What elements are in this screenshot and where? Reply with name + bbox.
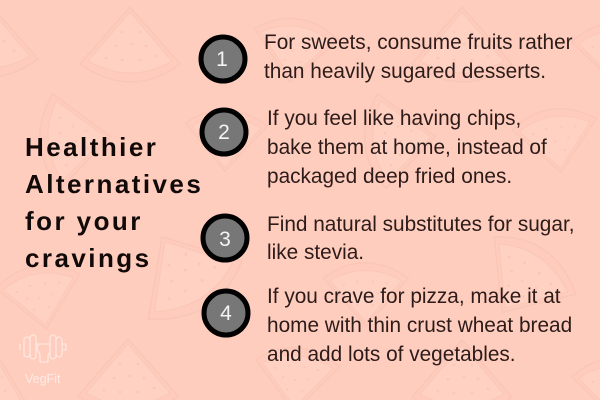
badge 4: [204, 291, 248, 335]
text 2: packaged deep fried ones.: [267, 165, 512, 188]
text 2: If you feel like having chips,: [267, 107, 521, 130]
badge 4: 4: [220, 302, 232, 325]
brand name: VegFit: [25, 372, 61, 386]
item 3: [203, 213, 574, 264]
title: Healthier: [25, 132, 158, 162]
text 1: For sweets, consume fruits rather: [264, 31, 573, 54]
title: [25, 132, 203, 273]
text 2: [267, 107, 547, 188]
text 4: [267, 285, 572, 366]
badge 1: 1: [216, 48, 228, 71]
item 4: [204, 285, 572, 366]
text 1: [264, 31, 573, 83]
badge 3: 3: [219, 228, 231, 251]
text 4: and add lots of vegetables.: [267, 343, 516, 366]
badge 3: [203, 216, 247, 260]
title: cravings: [25, 243, 152, 273]
text 3: Find natural substitutes for sugar,: [267, 213, 574, 236]
item 1: [201, 31, 573, 83]
text 4: home with thin crust wheat bread: [267, 314, 572, 337]
badge 2: 2: [218, 121, 230, 144]
text 3: like stevia.: [267, 241, 364, 264]
title: for your: [25, 206, 143, 236]
title: Alternatives: [25, 169, 203, 199]
text 3: [267, 213, 574, 264]
icon: dumbbell and arm: [20, 335, 66, 362]
badge 2: [202, 110, 246, 154]
badge 1: [201, 37, 245, 81]
text 2: bake them at home, instead of: [267, 136, 547, 159]
logo: VegFit: [20, 335, 66, 386]
text 1: than heavily sugared desserts.: [264, 60, 546, 83]
item 2: [202, 107, 547, 188]
text 4: If you crave for pizza, make it at: [267, 285, 561, 308]
